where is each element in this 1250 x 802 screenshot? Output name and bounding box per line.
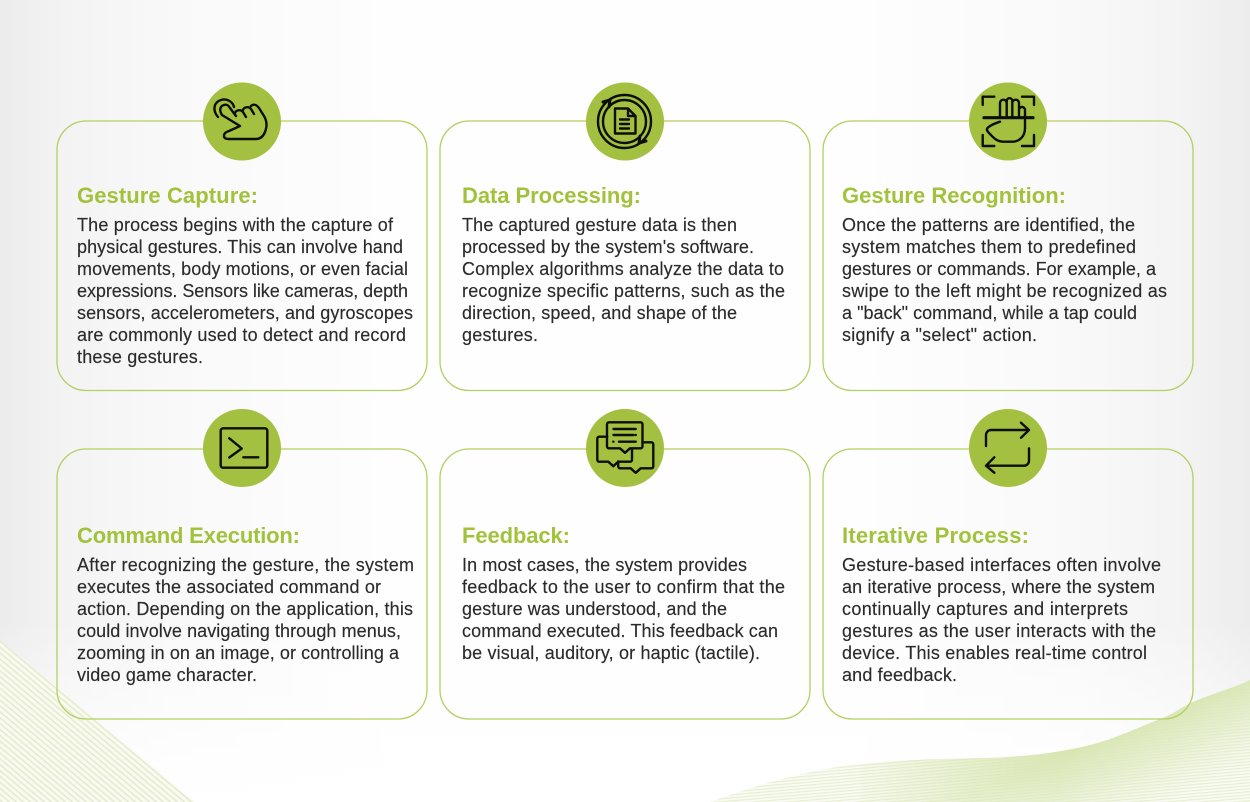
body text: direction, speed, and shape of the xyxy=(462,303,737,323)
body text: an iterative process, where the system xyxy=(842,577,1155,597)
card outline xyxy=(440,449,810,719)
decorative wave: bottom left xyxy=(0,640,195,802)
body text: gestures as the user interacts with the xyxy=(842,621,1156,641)
body text xyxy=(842,215,1167,345)
body text: system matches them to predefined xyxy=(842,237,1136,257)
panel: data processing xyxy=(440,82,810,390)
body text: continually captures and interprets xyxy=(842,599,1128,619)
card outline xyxy=(57,121,427,390)
heading: Command Execution: xyxy=(77,523,300,548)
icon: repeat arrows xyxy=(969,409,1047,487)
heading: Gesture Recognition: xyxy=(842,183,1066,208)
body text: could involve navigating through menus, xyxy=(77,621,401,641)
body text: gesture was understood, and the xyxy=(462,599,727,619)
heading: Iterative Process: xyxy=(842,523,1029,548)
body text: a "back" command, while a tap could xyxy=(842,303,1137,323)
body text: executes the associated command or xyxy=(77,577,381,597)
body text: feedback to the user to confirm that the xyxy=(462,577,785,597)
body text: and feedback. xyxy=(842,665,957,685)
icon: terminal prompt xyxy=(203,409,281,487)
body text: Complex algorithms analyze the data to xyxy=(462,259,784,279)
icon: tapping hand xyxy=(203,82,281,160)
body text: physical gestures. This can involve hand xyxy=(77,237,403,257)
body text: The captured gesture data is then xyxy=(462,215,737,235)
card outline xyxy=(440,121,810,390)
body text: processed by the system's software. xyxy=(462,237,754,257)
body text: these gestures. xyxy=(77,347,203,367)
body text xyxy=(462,215,785,345)
panel: iterative process xyxy=(823,409,1193,719)
body text: sensors, accelerometers, and gyroscopes xyxy=(77,303,413,323)
card outline xyxy=(823,121,1193,390)
body text: gestures. xyxy=(462,325,538,345)
body text: zooming in on an image, or controlling a xyxy=(77,643,400,663)
panel: command execution xyxy=(57,409,427,719)
card outline xyxy=(823,449,1193,719)
panel: gesture recognition xyxy=(823,82,1193,390)
decorative wave: bottom right xyxy=(710,680,1250,802)
body text: recognize specific patterns, such as the xyxy=(462,281,785,301)
icon: hand scan xyxy=(969,82,1047,160)
body text xyxy=(842,555,1161,685)
body text: device. This enables real-time control xyxy=(842,643,1147,663)
body text: action. Depending on the application, this xyxy=(77,599,413,619)
icon: chat bubbles xyxy=(586,409,664,487)
body text xyxy=(77,555,414,685)
body text: gestures or commands. For example, a xyxy=(842,259,1157,279)
icon: document cycle xyxy=(586,82,664,160)
heading: Data Processing: xyxy=(462,183,641,208)
body text: Gesture-based interfaces often involve xyxy=(842,555,1161,575)
body text: After recognizing the gesture, the system xyxy=(77,555,414,575)
body text: video game character. xyxy=(77,665,257,685)
body text: Once the patterns are identified, the xyxy=(842,215,1135,235)
panel: gesture capture xyxy=(57,82,427,390)
heading: Feedback: xyxy=(462,523,570,548)
body text: In most cases, the system provides xyxy=(462,555,747,575)
body text: be visual, auditory, or haptic (tactile). xyxy=(462,643,760,663)
heading: Gesture Capture: xyxy=(77,183,258,208)
body text: signify a "select" action. xyxy=(842,325,1037,345)
body text xyxy=(462,555,785,663)
body text: The process begins with the capture of xyxy=(77,215,394,235)
panel: feedback xyxy=(440,409,810,719)
body text: movements, body motions, or even facial xyxy=(77,259,408,279)
body text: are commonly used to detect and record xyxy=(77,325,406,345)
card outline xyxy=(57,449,427,719)
body text xyxy=(77,215,413,367)
body text: expressions. Sensors like cameras, depth xyxy=(77,281,408,301)
body text: command executed. This feedback can xyxy=(462,621,778,641)
body text: swipe to the left might be recognized as xyxy=(842,281,1167,301)
